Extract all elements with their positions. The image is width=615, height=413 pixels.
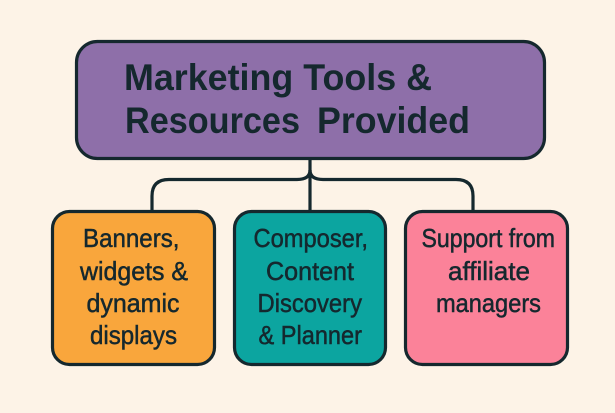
text: support: Support from [422,223,555,253]
text: support [422,223,555,318]
heading: Marketing Tools & Resources Provided: Provided [317,100,470,141]
heading: Marketing Tools & Resources Provided: Marketing Tools & [124,57,432,98]
text: composer: Content [266,256,355,286]
panel: composer, content discovery and planner [234,212,386,364]
text: banners: widgets & [79,256,188,286]
panel: header [76,42,544,158]
text: composer: & Planner [258,320,362,350]
panel: support from affiliate managers [406,212,568,364]
text: composer: Discovery [258,288,362,318]
text: banners: Banners, [83,223,180,253]
text: banners: dynamic [86,288,180,318]
connector lines from header to boxes [152,160,473,211]
text: support: managers [436,288,541,318]
text: composer: Composer, [254,223,368,253]
panel: banners, widgets and dynamic displays [52,212,214,364]
heading: Marketing Tools & Resources Provided [124,57,470,141]
text: composer [254,223,368,350]
text: banners [79,223,188,350]
text: banners: displays [90,320,177,350]
text: support: affiliate [448,256,530,286]
heading: Marketing Tools & Resources Provided: Resources [125,100,300,141]
